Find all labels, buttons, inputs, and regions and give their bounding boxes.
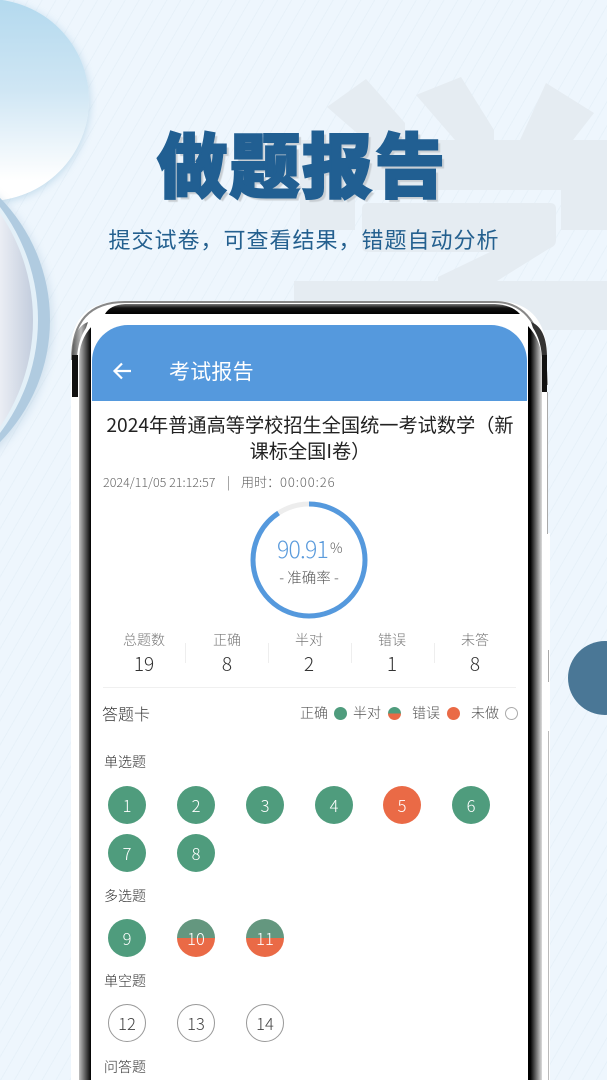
stat: half correct: 2 — [304, 650, 314, 677]
answer grid: single choice: 2 — [192, 793, 200, 817]
date and time used: | — [227, 472, 230, 491]
subtitle: 提交试卷，可查看结果，错题自动分析 — [108, 223, 500, 255]
answer grid: multiple choice: 9 — [123, 926, 131, 950]
decorative circle: left disc — [0, 130, 33, 510]
accuracy label: - 准确率 - — [279, 567, 339, 588]
answer grid: multiple choice: 10 — [187, 926, 205, 950]
exam title — [106, 410, 514, 464]
stat: correct: 正确 — [213, 630, 241, 650]
exam title: 2024年普通高等学校招生全国统一考试数学（新 — [106, 410, 514, 438]
answer grid: fill in blank — [108, 1004, 284, 1042]
stat: wrong: 1 — [387, 650, 397, 677]
answer grid: single choice: 8 — [192, 841, 200, 865]
stats row — [103, 630, 516, 688]
stat: total: 19 — [134, 650, 154, 677]
answer card heading: 答题卡 — [102, 701, 150, 725]
answer grid: single choice: 7 — [123, 841, 131, 865]
header title: 考试报告 — [169, 356, 254, 386]
answer grid: single choice: 6 — [467, 793, 475, 817]
back arrow icon — [113, 362, 131, 380]
answer grid: fill in blank: 13 — [187, 1011, 205, 1035]
decorative circle: left ring — [0, 146, 50, 494]
stat: unanswered — [461, 630, 489, 677]
answer grid: single choice: 3 — [261, 793, 269, 817]
section label: fill in blank: 单空题 — [104, 971, 146, 991]
answer grid: fill in blank: 12 — [118, 1011, 136, 1035]
decorative circle: left ring inner — [0, 133, 38, 507]
section label: multiple choice: 多选题 — [104, 886, 146, 906]
legend: 正确 — [300, 703, 328, 723]
accuracy value: 90.91 — [277, 531, 328, 565]
decorative circle: top left — [0, 0, 89, 201]
stat: wrong — [378, 630, 406, 677]
stat: half correct: 半对 — [295, 630, 323, 650]
stat: unanswered: 8 — [470, 650, 480, 677]
accuracy ring chart — [250, 502, 368, 618]
date and time used: 2024/11/05 21:12:57 — [103, 472, 216, 491]
legend: 半对 — [353, 703, 381, 723]
stat: total — [123, 630, 165, 677]
stat: correct: 8 — [222, 650, 232, 677]
date and time used: 00:00:26 — [280, 472, 335, 491]
answer grid: single choice — [108, 786, 490, 872]
exam title: 课标全国I卷） — [250, 436, 370, 464]
date and time used — [103, 472, 335, 491]
decorative watermark character — [294, 77, 607, 330]
answer grid: multiple choice — [108, 919, 284, 957]
app header bar — [92, 325, 527, 401]
answer grid: single choice: 1 — [123, 793, 131, 817]
stat: correct — [213, 630, 241, 677]
section label: questions: 问答题 — [104, 1057, 146, 1077]
legend: 未做 — [471, 703, 499, 723]
stat: half correct — [295, 630, 323, 677]
answer grid: fill in blank: 14 — [256, 1011, 274, 1035]
answer grid: single choice: 5 — [398, 793, 406, 817]
phone screen — [91, 325, 528, 1080]
stat: unanswered: 未答 — [461, 630, 489, 650]
legend: 错误 — [412, 703, 440, 723]
answer grid: single choice: 4 — [330, 793, 338, 817]
percent sign: % — [330, 538, 343, 558]
decorative circle: right — [568, 641, 607, 715]
stat: total: 总题数 — [123, 630, 165, 650]
date and time used: 用时： — [241, 472, 280, 491]
legend — [300, 703, 518, 723]
answer grid: multiple choice: 11 — [256, 926, 274, 950]
section label: single choice: 单选题 — [104, 752, 146, 772]
stat: wrong: 错误 — [378, 630, 406, 650]
title: 做题报告 — [157, 111, 447, 213]
